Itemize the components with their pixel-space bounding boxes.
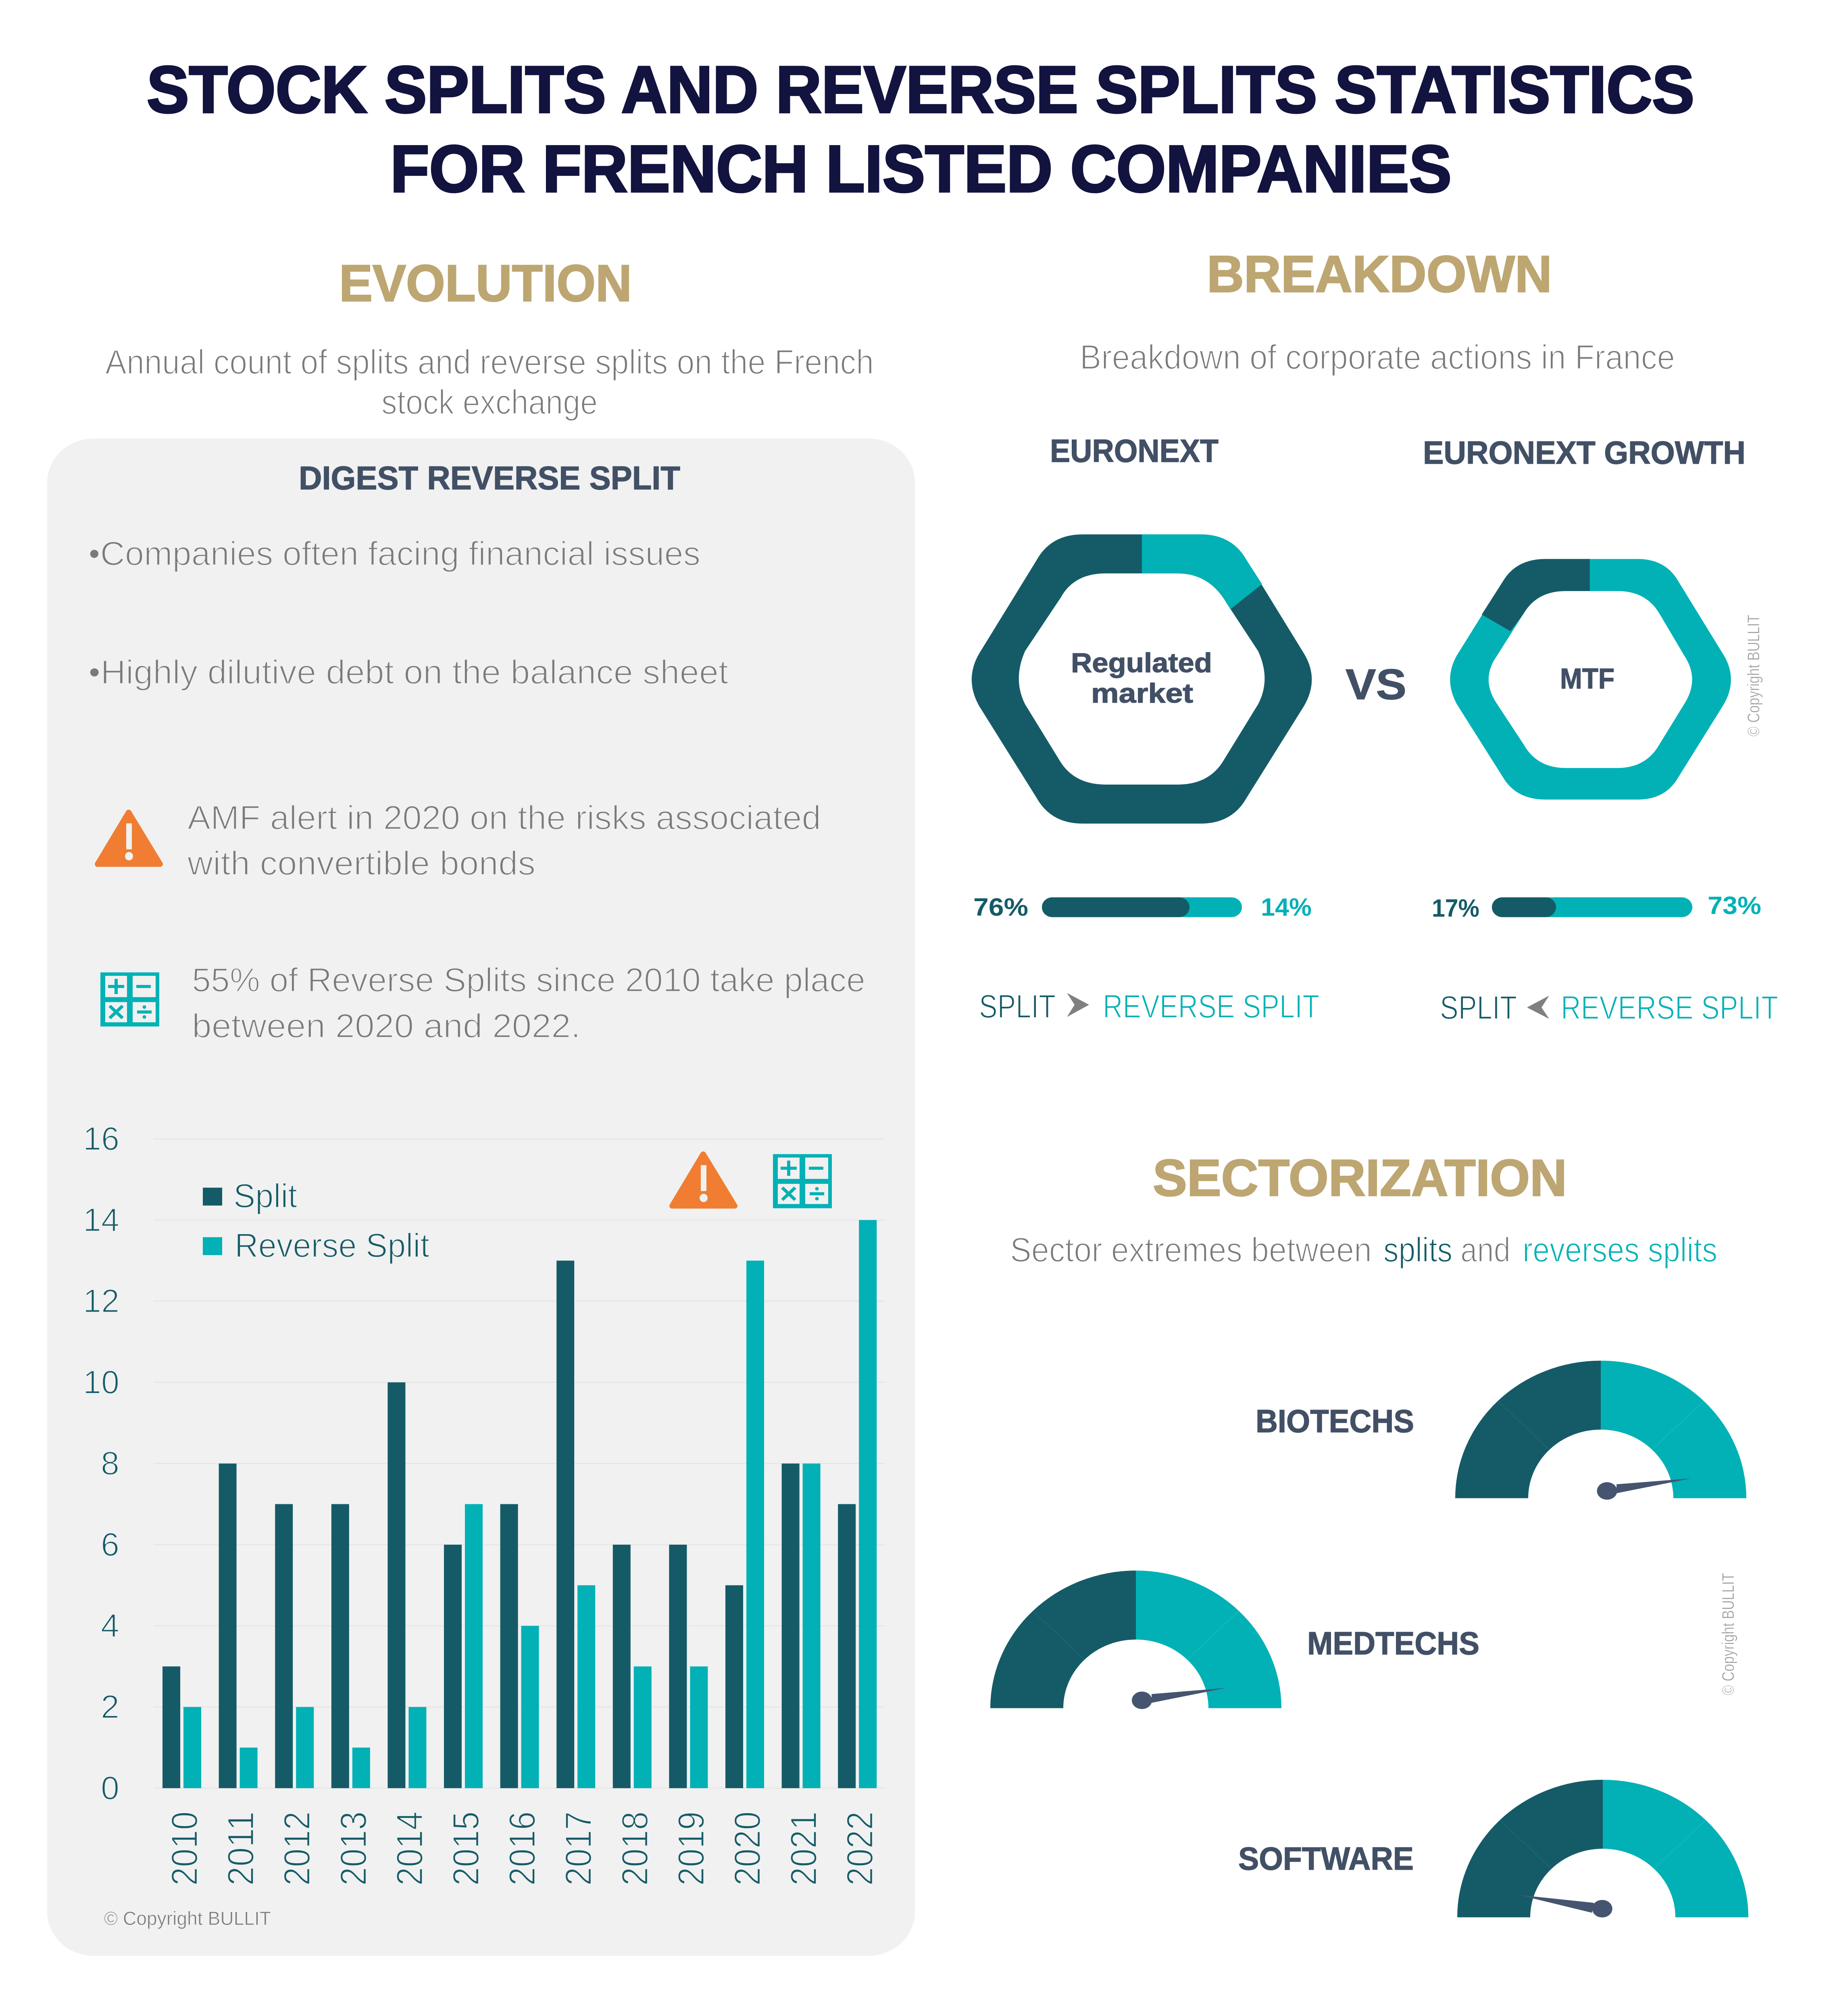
text block: sectorization subtitle (1010, 1231, 1717, 1269)
x axis year labels: 2014 (389, 1812, 430, 1886)
legend: split greater than reverse split: SPLIT (979, 988, 1056, 1025)
text block: AMF alert: with convertible bonds (187, 845, 535, 882)
bars: reverse split series (183, 1220, 877, 1788)
y axis labels: 4 (101, 1607, 119, 1644)
y axis labels: 8 (101, 1445, 119, 1482)
label: software: SOFTWARE (1238, 1841, 1414, 1877)
icon: warning triangle (98, 812, 160, 864)
text block: 55% of reverse splits (192, 961, 865, 1045)
copyright: panel: © Copyright BULLIT (104, 1908, 271, 1929)
text block: breakdown subtitle: Breakdown of corporate actions in France (1080, 338, 1675, 376)
label: regulated market: Regulated (1071, 648, 1212, 678)
x axis year labels: 2011 (220, 1812, 261, 1886)
label: vs: VS (1346, 660, 1406, 708)
progress bar: euronext: 76% (973, 893, 1028, 921)
x axis year labels (164, 1812, 881, 1886)
x axis year labels: 2016 (501, 1812, 543, 1886)
legend: split less than reverse split: SPLIT (1440, 989, 1517, 1026)
text block: 55% of reverse splits: 55% of Reverse Splits since 2010 take place (192, 961, 865, 999)
y axis labels: 0 (101, 1769, 119, 1806)
gauge: medtechs (990, 1570, 1281, 1709)
heading: digest reverse split: DIGEST REVERSE SPLIT (299, 460, 680, 496)
progress bar: euronext (973, 893, 1312, 921)
chart: euronext growth hexagon ring (1450, 559, 1731, 800)
legend: split greater than reverse split: REVERSE SPLIT (1103, 988, 1319, 1025)
progress bar: euronext growth (1432, 891, 1761, 922)
x axis year labels: 2017 (558, 1812, 599, 1886)
text block: sectorization subtitle: reverses splits (1523, 1231, 1717, 1269)
text block: sectorization subtitle: splits (1383, 1231, 1452, 1269)
text block: bullet dilutive debt: •Highly dilutive debt on the balance sheet (88, 654, 728, 691)
x axis year labels: 2018 (614, 1812, 655, 1886)
y axis labels: 6 (101, 1526, 119, 1563)
panel: digest reverse split (47, 439, 915, 1956)
y axis labels (83, 1120, 119, 1806)
legend: Split (233, 1177, 297, 1215)
heading: sectorization: SECTORIZATION (1153, 1149, 1567, 1207)
title: FOR FRENCH LISTED COMPANIES (390, 132, 1452, 206)
label: regulated market: market (1091, 678, 1193, 708)
title: STOCK SPLITS AND REVERSE SPLITS STATISTICS (147, 52, 1694, 127)
y axis labels: 10 (83, 1364, 119, 1400)
x axis year labels: 2015 (445, 1812, 487, 1886)
icon: calculator marker on chart (773, 1154, 832, 1208)
x axis year labels: 2013 (333, 1812, 374, 1886)
y axis labels: 16 (83, 1120, 119, 1157)
text block: AMF alert: AMF alert in 2020 on the risks associated (187, 799, 821, 837)
chart: euronext hexagon ring (972, 534, 1312, 824)
progress bar: euronext: 14% (1261, 893, 1312, 921)
heading: euronext growth: EURONEXT GROWTH (1423, 435, 1746, 471)
label: biotechs: BIOTECHS (1256, 1404, 1414, 1439)
legend: split less than reverse split: REVERSE SPLIT (1561, 989, 1778, 1026)
legend: Reverse Split (235, 1227, 429, 1264)
label: regulated market (1071, 648, 1212, 708)
gauge: biotechs (1455, 1361, 1746, 1500)
y axis labels: 2 (101, 1688, 119, 1725)
heading: euronext: EURONEXT (1050, 433, 1219, 469)
text block: evolution subtitle (105, 343, 874, 421)
bars: split series (162, 1261, 856, 1788)
x axis year labels: 2020 (727, 1812, 768, 1886)
progress bar: euronext growth: 73% (1708, 891, 1761, 920)
x axis year labels: 2010 (164, 1812, 205, 1886)
text block: sectorization subtitle: and (1460, 1231, 1510, 1269)
gauge: software (1457, 1780, 1748, 1918)
label: medtechs: MEDTECHS (1307, 1626, 1479, 1662)
legend (203, 1177, 429, 1264)
icon: calculator (100, 973, 159, 1027)
copyright: sector vertical: © Copyright BULLIT (1719, 1573, 1737, 1695)
legend: split less than reverse split (1440, 989, 1778, 1026)
x axis year labels: 2022 (839, 1812, 881, 1886)
copyright: breakdown vertical: © Copyright BULLIT (1744, 614, 1763, 737)
title (147, 52, 1694, 206)
text block: evolution subtitle: Annual count of splits and reverse splits on the French (105, 343, 874, 381)
icon: warning marker on chart (672, 1154, 735, 1206)
text block: bullet financial issues: •Companies often facing financial issues (88, 535, 700, 573)
x axis year labels: 2019 (670, 1812, 712, 1886)
x axis year labels: 2021 (783, 1812, 824, 1886)
bar chart: annual count of splits and reverse splits (83, 1120, 885, 1886)
text block: evolution subtitle: stock exchange (381, 383, 598, 421)
progress bar: euronext growth: 17% (1432, 894, 1479, 922)
label: MTF: MTF (1560, 662, 1614, 695)
y axis labels: 12 (83, 1283, 119, 1319)
y axis labels: 14 (83, 1201, 119, 1238)
heading: evolution: EVOLUTION (339, 254, 632, 312)
x axis year labels: 2012 (276, 1812, 318, 1886)
legend: split greater than reverse split (979, 988, 1319, 1025)
text block: AMF alert (187, 799, 821, 882)
text block: 55% of reverse splits: between 2020 and 2022. (192, 1007, 581, 1045)
text block: sectorization subtitle: Sector extremes between (1010, 1231, 1372, 1269)
heading: breakdown: BREAKDOWN (1207, 245, 1552, 303)
